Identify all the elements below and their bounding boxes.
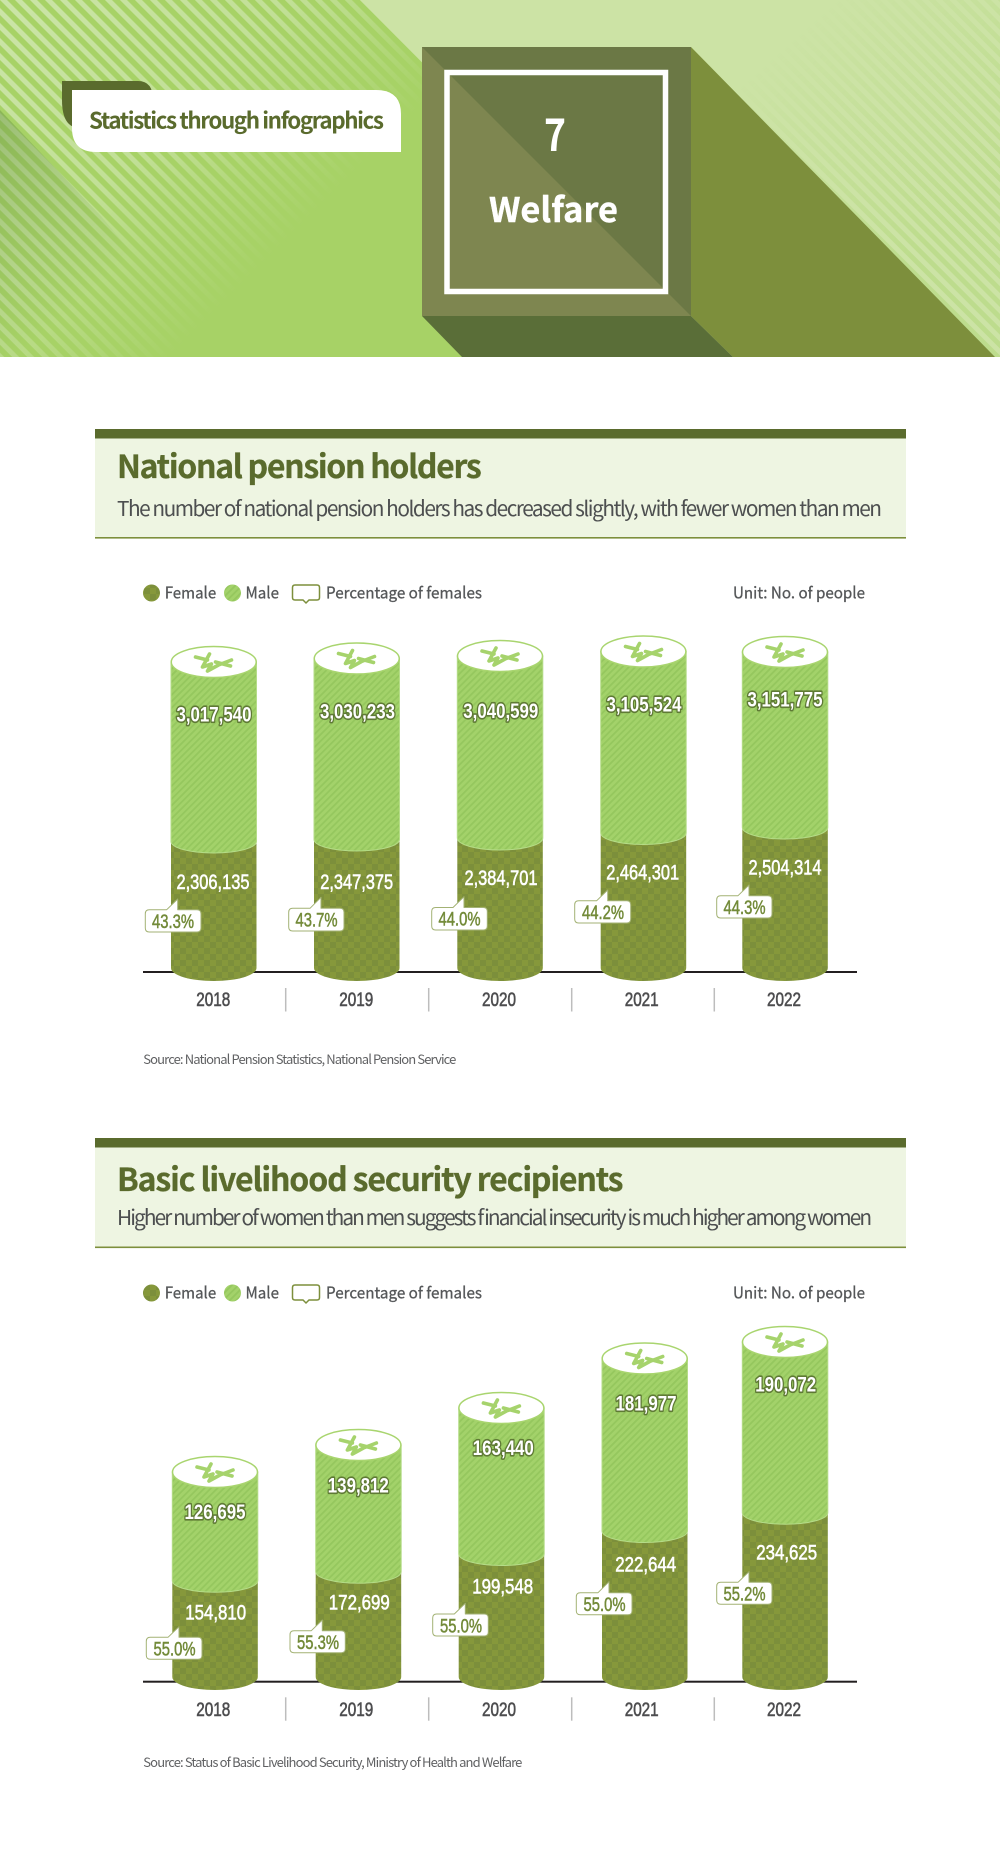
top bar [95,1138,906,1148]
chart 1: national pension holders by sex [143,636,857,1012]
section 1 source: Source: National Pension Statistics, National Pension Service [143,1049,456,1068]
legend male label: Male [246,1280,279,1304]
year axis labels: 2019 [339,989,373,1011]
bar 2018: 126,695 [184,1500,246,1524]
panel background [95,1147,906,1248]
legend female label: Female [165,1280,216,1304]
legend female swatch [143,584,160,602]
bar 2019 [290,1430,401,1690]
year axis labels: 2020 [482,989,516,1011]
year axis labels: 2020 [482,1699,516,1721]
bar 2021: 181,977 [616,1392,677,1416]
year axis labels: 2022 [767,1699,801,1721]
header right stripes [790,0,1000,357]
tag dark tab [62,81,153,128]
legend callout icon [292,585,320,603]
section 2 heading panel [95,1138,906,1248]
bar 2018 [146,1456,258,1690]
section 1 legend [143,580,865,604]
bar 2020: 44.0% [438,908,480,930]
section 1 subtitle: The number of national pension holders has decreased slightly, with fewer women than men [117,492,882,522]
block lower diagonal face [422,47,691,316]
section 2 title: Basic livelihood security recipients [117,1155,624,1201]
bar 2022: 2,504,314 [748,856,822,880]
chapter number: 7 [544,99,566,164]
bar 2022: 55.2% [724,1584,766,1606]
block upper face [422,47,691,316]
bar 2018: 55.0% [154,1638,196,1660]
unit note: Unit: No. of people [733,580,865,604]
bar 2022 [717,636,828,981]
year axis labels: 2021 [625,1699,659,1721]
header banner [0,0,1000,357]
bar 2019: 139,812 [328,1474,389,1498]
bar 2020: 163,440 [473,1436,534,1460]
block cast shadow [691,47,995,357]
bar 2020 [432,640,543,981]
section 2 subtitle: Higher number of women than men suggests financial insecurity is much higher among women [117,1201,872,1231]
bar 2019: 2,347,375 [320,870,393,894]
section 1 title: National pension holders [117,442,482,488]
year axis labels [196,1697,801,1721]
chapter title: Welfare [489,183,618,232]
section 2 source: Source: Status of Basic Livelihood Security, Ministry of Health and Welfare [143,1752,522,1771]
bar 2021: 3,105,524 [606,692,682,716]
bar 2020: 3,040,599 [463,699,538,723]
top bar [95,429,906,438]
axis line [143,1681,857,1683]
year axis labels: 2018 [196,989,230,1011]
header background green [0,0,1000,357]
bar 2018: 43.3% [152,911,194,933]
unit note: Unit: No. of people [733,1280,865,1304]
section 1 heading panel [95,429,906,539]
bottom line [95,537,906,539]
year axis labels [196,988,801,1012]
bar 2021 [575,636,686,981]
bar 2019: 55.3% [297,1632,339,1654]
bar 2021 [576,1343,688,1690]
bar 2021: 222,644 [615,1553,676,1577]
bar 2019: 43.7% [296,910,338,932]
legend male label: Male [246,580,279,604]
tag text: Statistics through infographics [89,104,384,136]
bar 2021: 2,464,301 [606,860,679,884]
bar 2022: 234,625 [756,1541,817,1565]
legend male swatch [224,1284,241,1302]
bar 2018: 2,306,135 [176,870,250,894]
legend male swatch [224,584,241,602]
bar 2022: 190,072 [755,1372,816,1396]
bar 2020: 199,548 [472,1574,533,1598]
bar 2019: 172,699 [329,1591,390,1615]
header light polygon [360,0,1000,357]
bar 2020 [433,1392,544,1690]
legend callout label: Percentage of females [326,1280,482,1304]
bar 2020: 55.0% [440,1616,482,1638]
bar 2018: 3,017,540 [176,702,252,726]
section 2 legend [143,1280,865,1304]
bar 2019: 3,030,233 [320,700,395,724]
bar 2018: 154,810 [185,1601,246,1625]
bar 2019 [289,643,400,981]
bar 2020: 2,384,701 [464,866,538,890]
year axis labels: 2018 [196,1699,230,1721]
tag white label [72,90,401,152]
bar 2018 [145,646,256,981]
legend female swatch [143,1284,160,1302]
legend callout label: Percentage of females [326,580,482,604]
bar 2021: 44.2% [582,902,624,924]
legend callout icon [292,1285,320,1303]
legend female label: Female [165,580,216,604]
chart 2: basic livelihood security recipients by sex [143,1326,857,1721]
year axis labels: 2019 [339,1699,373,1721]
axis line [143,971,857,973]
bar 2022: 44.3% [724,897,766,919]
block underside [422,316,733,357]
panel background [95,438,906,538]
header left stripes [0,0,430,357]
bar 2022 [717,1326,828,1690]
year axis labels: 2022 [767,989,801,1011]
year axis labels: 2021 [625,989,659,1011]
header left darker wedge [0,110,220,357]
bottom line [95,1246,906,1248]
bar 2022: 3,151,775 [748,688,823,712]
block white frame [447,72,666,292]
bar 2021: 55.0% [584,1594,626,1616]
